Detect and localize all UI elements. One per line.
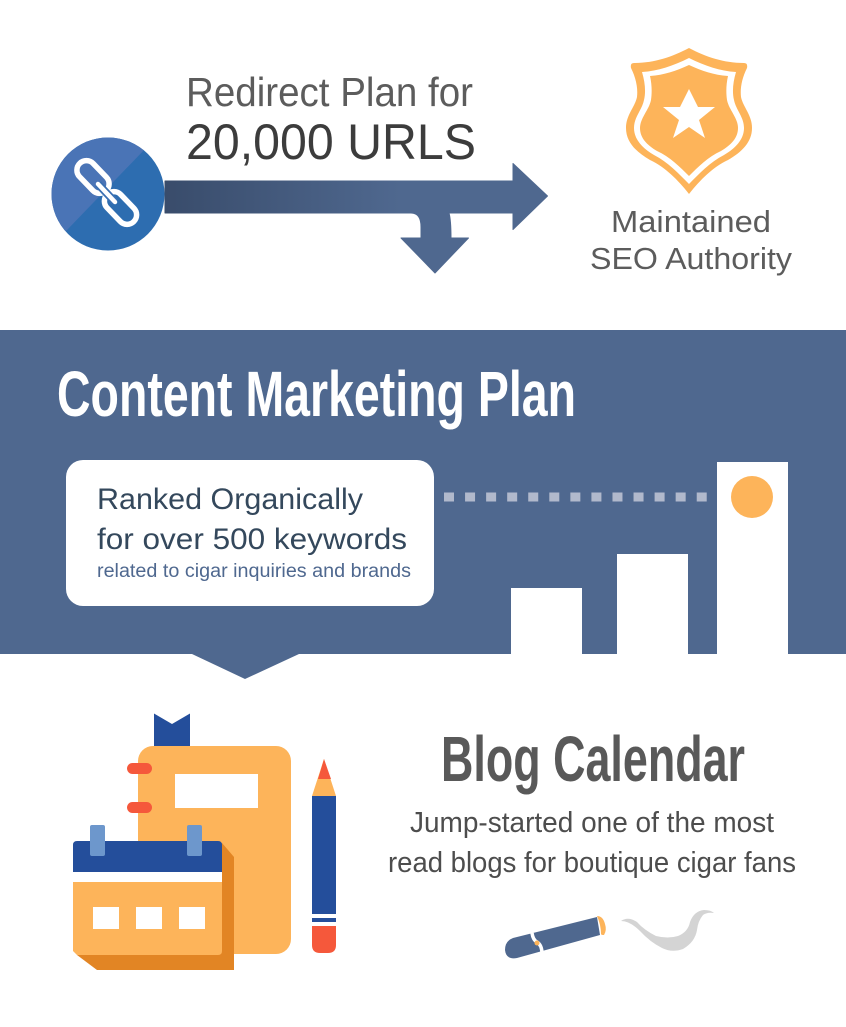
icon: chain link xyxy=(52,138,164,250)
callout: ranked organically: Ranked Organically xyxy=(97,483,363,516)
redirect heading xyxy=(186,69,476,170)
icon: smoke xyxy=(621,910,714,951)
panel: content marketing plan xyxy=(0,330,846,679)
arrow: redirect split xyxy=(165,164,548,273)
dotted connector xyxy=(444,492,708,502)
callout: ranked organically xyxy=(66,460,434,606)
redirect heading: Redirect Plan for xyxy=(186,69,473,115)
redirect heading: 20,000 URLS xyxy=(186,114,476,170)
blog description xyxy=(388,807,796,879)
heading: content marketing plan: Content Marketing Plan xyxy=(57,358,576,430)
callout: ranked organically: related to cigar inquiries and brands xyxy=(97,561,411,582)
callout: ranked organically: for over 500 keywords xyxy=(97,523,407,556)
icon: cigar xyxy=(505,916,606,958)
blog description: read blogs for boutique cigar fans xyxy=(388,847,796,879)
icon: pencil xyxy=(312,759,336,953)
icon: notebook xyxy=(127,714,291,954)
icon: shield with star xyxy=(626,48,752,194)
chart marker xyxy=(731,476,773,518)
shield caption xyxy=(590,204,793,276)
shield caption: Maintained xyxy=(611,204,771,239)
icon: calendar xyxy=(73,825,234,970)
blog description: Jump-started one of the most xyxy=(410,807,774,839)
shield caption: SEO Authority xyxy=(590,241,793,276)
bar chart xyxy=(511,462,788,654)
